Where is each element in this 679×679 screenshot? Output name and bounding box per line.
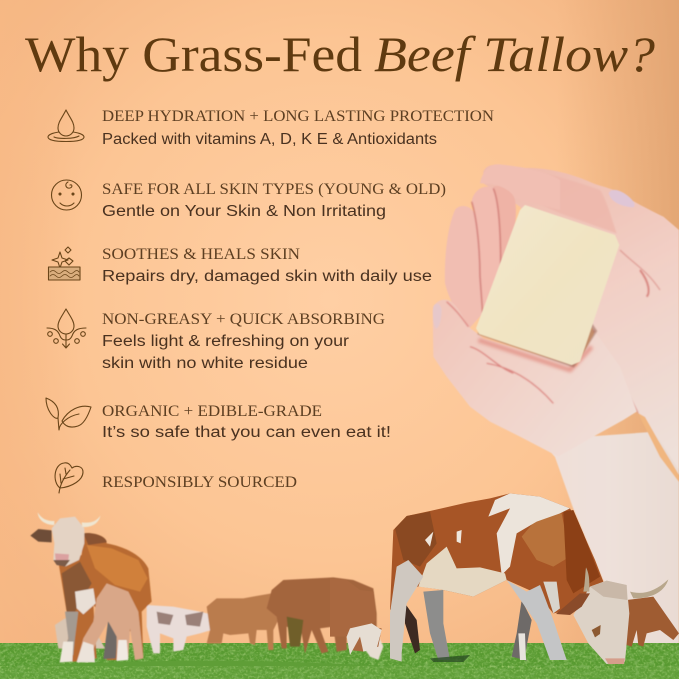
title: Why Grass-Fed: [25, 26, 362, 82]
description: Gentle on Your Skin & Non Irritating: [102, 203, 386, 220]
grazing head: [358, 632, 383, 660]
index fingertip: [480, 164, 560, 210]
far legs: [512, 600, 532, 661]
item 1: deep hydration: [48, 108, 494, 148]
forearm: [540, 430, 679, 660]
soap bar: [476, 205, 619, 365]
item 4: non-greasy: [47, 309, 385, 372]
little finger: [445, 206, 483, 328]
soap shadow: [477, 218, 597, 368]
description line 2: skin with no white residue: [102, 355, 308, 372]
right hand: [483, 165, 679, 470]
calf: [77, 583, 143, 662]
item 3: soothes and heals: [48, 246, 432, 285]
description: It’s so safe that you can even eat it!: [102, 424, 391, 441]
icon: drop with absorbing roots: [47, 309, 86, 348]
item 6: responsibly sourced: [55, 463, 297, 493]
icon: water drop: [48, 110, 84, 142]
head: [573, 581, 629, 664]
front leg: [507, 580, 567, 660]
cow head: [52, 517, 84, 567]
body: [390, 493, 603, 613]
nail: left thumb: [433, 304, 442, 329]
heading: ORGANIC + EDIBLE-GRADE: [102, 403, 322, 420]
spotted calf: [147, 605, 217, 653]
small cow at right: [623, 597, 679, 647]
white saddle: [488, 493, 570, 575]
heading: SOOTHES & HEALS SKIN: [102, 246, 300, 263]
left fingers: [445, 164, 560, 328]
description: Packed with vitamins A, D, K E & Antioxidants: [102, 131, 437, 148]
heading: NON-GREASY + QUICK ABSORBING: [102, 311, 385, 328]
photo: herd, left group: [30, 512, 383, 662]
cow front legs: [60, 612, 78, 662]
brown cow: [207, 593, 283, 650]
middle cows: [55, 577, 383, 660]
icon: baby face: [52, 180, 82, 210]
nail: right index: [609, 190, 635, 207]
grass: [0, 643, 679, 679]
ear: [556, 593, 590, 615]
item 2: safe for all skin types: [52, 180, 446, 220]
far calf: [55, 618, 105, 648]
item 5: organic: [46, 398, 391, 441]
heading: SAFE FOR ALL SKIN TYPES (YOUNG & OLD): [102, 181, 446, 198]
icon: sparkles over skin layer: [48, 247, 80, 280]
standing cow with calf: [30, 512, 152, 662]
wedge between forearms: [638, 413, 679, 482]
rear legs: [390, 560, 423, 662]
label: RESPONSIBLY SOURCED: [102, 474, 297, 491]
calf head: [75, 588, 96, 614]
tail: [405, 603, 420, 653]
icon: two leaves: [46, 398, 91, 430]
description: Repairs dry, damaged skin with daily use: [102, 268, 432, 285]
photo: large grazing cow: [330, 493, 679, 664]
left palm and thumb: [433, 190, 637, 457]
foreground grass: [0, 661, 679, 679]
small calf, far left: [55, 618, 103, 648]
icon: heart leaf: [55, 463, 83, 493]
middle finger: [493, 186, 516, 267]
white belly: [418, 547, 507, 597]
cow body: [58, 534, 152, 662]
heading: DEEP HYDRATION + LONG LASTING PROTECTION: [102, 108, 494, 125]
horns: [38, 512, 100, 527]
cow at left edge: [330, 578, 382, 652]
title: Beef Tallow?: [374, 26, 655, 82]
ring finger: [472, 187, 501, 313]
description: Feels light & refreshing on your: [102, 333, 349, 350]
large brown cow: [267, 577, 377, 653]
photo: hands holding soap: [433, 164, 679, 660]
grass shadow: [430, 655, 470, 662]
horns: [583, 567, 668, 598]
